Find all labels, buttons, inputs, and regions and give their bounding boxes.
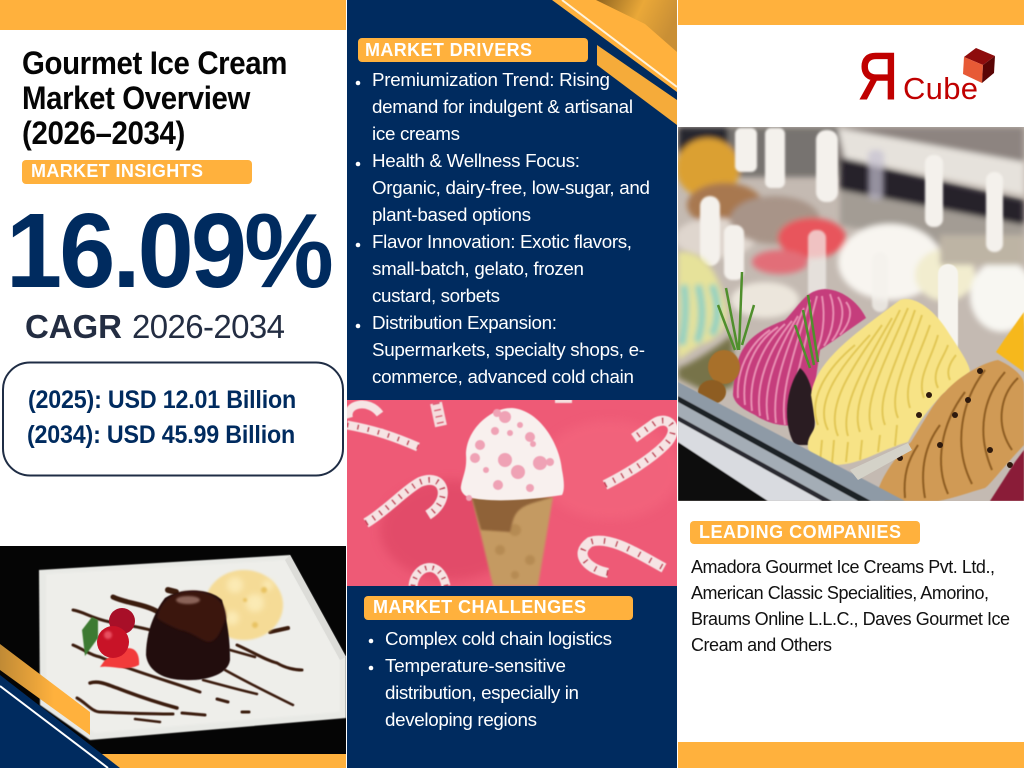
callout: market size (3, 362, 343, 476)
text block: market drivers list (356, 69, 650, 387)
text block: market drivers list: demand for indulgent & artisanal (372, 96, 633, 117)
heading: leading companies: LEADING COMPANIES (699, 522, 901, 542)
photo: chocolate lava cake with ice cream (0, 546, 346, 754)
panel: left column (0, 0, 346, 768)
logo: RCube: Я (858, 39, 898, 113)
bottom orange band left (100, 754, 346, 768)
text block: market drivers list: ice creams (372, 123, 460, 144)
text block: market drivers list: plant-based options (372, 204, 531, 225)
pink gelato (733, 289, 866, 425)
CAGR label: CAGR (25, 308, 122, 345)
heading: market insights (22, 160, 252, 184)
CAGR label: 2026-2034 (132, 308, 285, 345)
hazelnuts and leaves (698, 272, 818, 445)
heading: market insights: MARKET INSIGHTS (31, 161, 203, 181)
heading: market drivers: MARKET DRIVERS (365, 40, 532, 60)
text block: market challenges list: distribution, especially in (385, 682, 579, 703)
text block: market drivers list: commerce, advanced cold chain (372, 366, 634, 387)
text block: market challenges list: Complex cold chain logistics (385, 628, 612, 649)
heading: market challenges (364, 596, 633, 620)
decorative navy corner (0, 675, 120, 768)
text block: leading companies: American Classic Specialities, Amorino, (691, 583, 989, 603)
callout: market size: (2025): USD 12.01 Billion (28, 386, 296, 414)
text block: market drivers list: custard, sorbets (372, 285, 500, 306)
callout: market size: (2034): USD 45.99 Billion (27, 421, 295, 449)
text block: leading companies: Amadora Gourmet Ice Creams Pvt. Ltd., (691, 557, 995, 577)
caramel gelato (878, 360, 1024, 501)
decorative gold corner (552, 0, 677, 125)
text block: market drivers list: Distribution Expansion: (372, 312, 557, 333)
teal gelato (678, 252, 735, 395)
text block: market challenges list: Temperature-sensitive (385, 655, 566, 676)
title: Market Overview (22, 80, 250, 116)
CAGR label (25, 308, 285, 345)
text block: market challenges list (369, 628, 612, 730)
yellow gelato (808, 299, 970, 465)
big number: CAGR percentage: 16.09% (6, 192, 332, 310)
text block: market drivers list: Supermarkets, specialty shops, e- (372, 339, 645, 360)
mango and red berries (996, 312, 1024, 372)
text block: market challenges list: developing regions (385, 709, 537, 730)
text block: leading companies (691, 557, 1010, 655)
text block: market drivers list: Health & Wellness Focus: (372, 150, 580, 171)
bottom orange band right (678, 742, 1024, 768)
text block: market drivers list: Flavor Innovation: Exotic flavors, (372, 231, 632, 252)
top orange band left (0, 0, 346, 30)
title (22, 45, 287, 151)
text block: market drivers list: Premiumization Trend: Rising (372, 69, 610, 90)
logo: RCube: Cube (903, 71, 978, 106)
panel: middle column (347, 0, 680, 768)
text block: market drivers list: small-batch, gelato, frozen (372, 258, 584, 279)
top orange band right (678, 0, 1024, 25)
text block: leading companies: Cream and Others (691, 635, 832, 655)
photo: ice cream cone with candy canes (347, 400, 680, 586)
title: (2026–2034) (22, 115, 185, 151)
text block: market drivers list: Organic, dairy-free, low-sugar, and (372, 177, 650, 198)
text block: leading companies: Braums Online L.L.C., Daves Gourmet Ice (691, 609, 1010, 629)
decorative orange corner band (0, 644, 90, 735)
panel: right column (675, 0, 1024, 768)
heading: market challenges: MARKET CHALLENGES (373, 597, 586, 617)
logo: RCube (858, 39, 995, 113)
title: Gourmet Ice Cream (22, 45, 287, 81)
display rails (678, 382, 905, 501)
photo: gelato display (675, 127, 1024, 501)
heading: market drivers (358, 38, 588, 62)
